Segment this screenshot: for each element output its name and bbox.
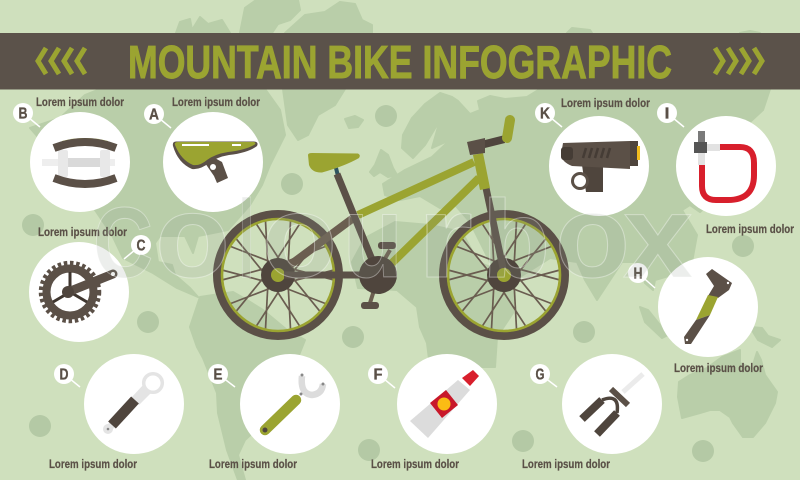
icon: suspension fork xyxy=(582,374,643,434)
panel G: suspension fork xyxy=(522,354,662,471)
icon: lock xyxy=(694,131,754,200)
bicycle xyxy=(217,120,565,336)
left chevrons xyxy=(38,48,85,74)
panel A: saddle: Lorem ipsum dolor xyxy=(172,97,260,109)
panel C: crankset: C xyxy=(136,238,146,254)
panel E: hook spanner: E xyxy=(214,366,222,384)
icon: chainring xyxy=(41,263,115,321)
panel F: glue tube: F xyxy=(374,366,382,384)
panel D: wrench: D xyxy=(60,366,68,384)
frame xyxy=(284,153,503,303)
panel I: bike lock xyxy=(657,103,794,236)
panel H: pump: Lorem ipsum dolor xyxy=(674,363,763,375)
icon: pump xyxy=(684,269,732,344)
panel A: saddle xyxy=(144,97,263,212)
watermark xyxy=(93,171,693,303)
handlebar xyxy=(467,120,510,155)
front wheel xyxy=(443,214,565,336)
panel H: pump: H xyxy=(634,266,642,282)
panel H: pump xyxy=(628,257,763,375)
watermark: C xyxy=(93,187,153,299)
watermark: b xyxy=(482,178,550,301)
panel K: bike light: Lorem ipsum dolor xyxy=(561,98,650,110)
panel E: hook spanner: Lorem ipsum dolor xyxy=(209,459,297,471)
icon: wrench xyxy=(103,374,162,434)
watermark: o xyxy=(262,171,337,303)
panel E: hook spanner xyxy=(208,354,340,471)
icon: saddle xyxy=(173,141,258,183)
chainring xyxy=(359,256,397,294)
panel G: suspension fork: G xyxy=(536,366,544,384)
panel D: wrench: Lorem ipsum dolor xyxy=(49,459,137,471)
watermark: l xyxy=(238,178,255,301)
panel F: glue tube xyxy=(368,354,497,471)
rear wheel xyxy=(217,214,339,336)
panel B: brake pads: Lorem ipsum dolor xyxy=(36,97,124,109)
panel D: wrench xyxy=(49,354,184,471)
watermark: u xyxy=(343,171,403,303)
icon: glue tube xyxy=(410,370,479,438)
watermark: x xyxy=(623,171,693,303)
pedals xyxy=(361,242,396,309)
panel G: suspension fork: Lorem ipsum dolor xyxy=(522,459,610,471)
panel B: brake pads: B xyxy=(18,106,28,122)
icon: hook spanner xyxy=(262,374,324,432)
icon: brake pads xyxy=(42,138,116,187)
watermark: o xyxy=(155,171,230,303)
right chevrons xyxy=(715,48,762,74)
title banner xyxy=(0,33,800,90)
panel K: bike light xyxy=(535,98,650,216)
front hub cap xyxy=(497,268,511,282)
background dots xyxy=(22,105,754,462)
panel B: brake pads xyxy=(13,97,130,212)
saddle xyxy=(308,153,360,173)
panel A: saddle: A xyxy=(149,106,159,124)
panel C: crankset: Lorem ipsum dolor xyxy=(38,227,127,239)
icon: bike light xyxy=(561,141,640,192)
panel I: bike lock: I xyxy=(664,106,670,122)
watermark: o xyxy=(555,171,630,303)
panel F: glue tube: Lorem ipsum dolor xyxy=(371,459,459,471)
watermark: r xyxy=(417,171,473,303)
panel K: bike light: K xyxy=(540,106,551,122)
panel C: crankset xyxy=(29,227,151,342)
